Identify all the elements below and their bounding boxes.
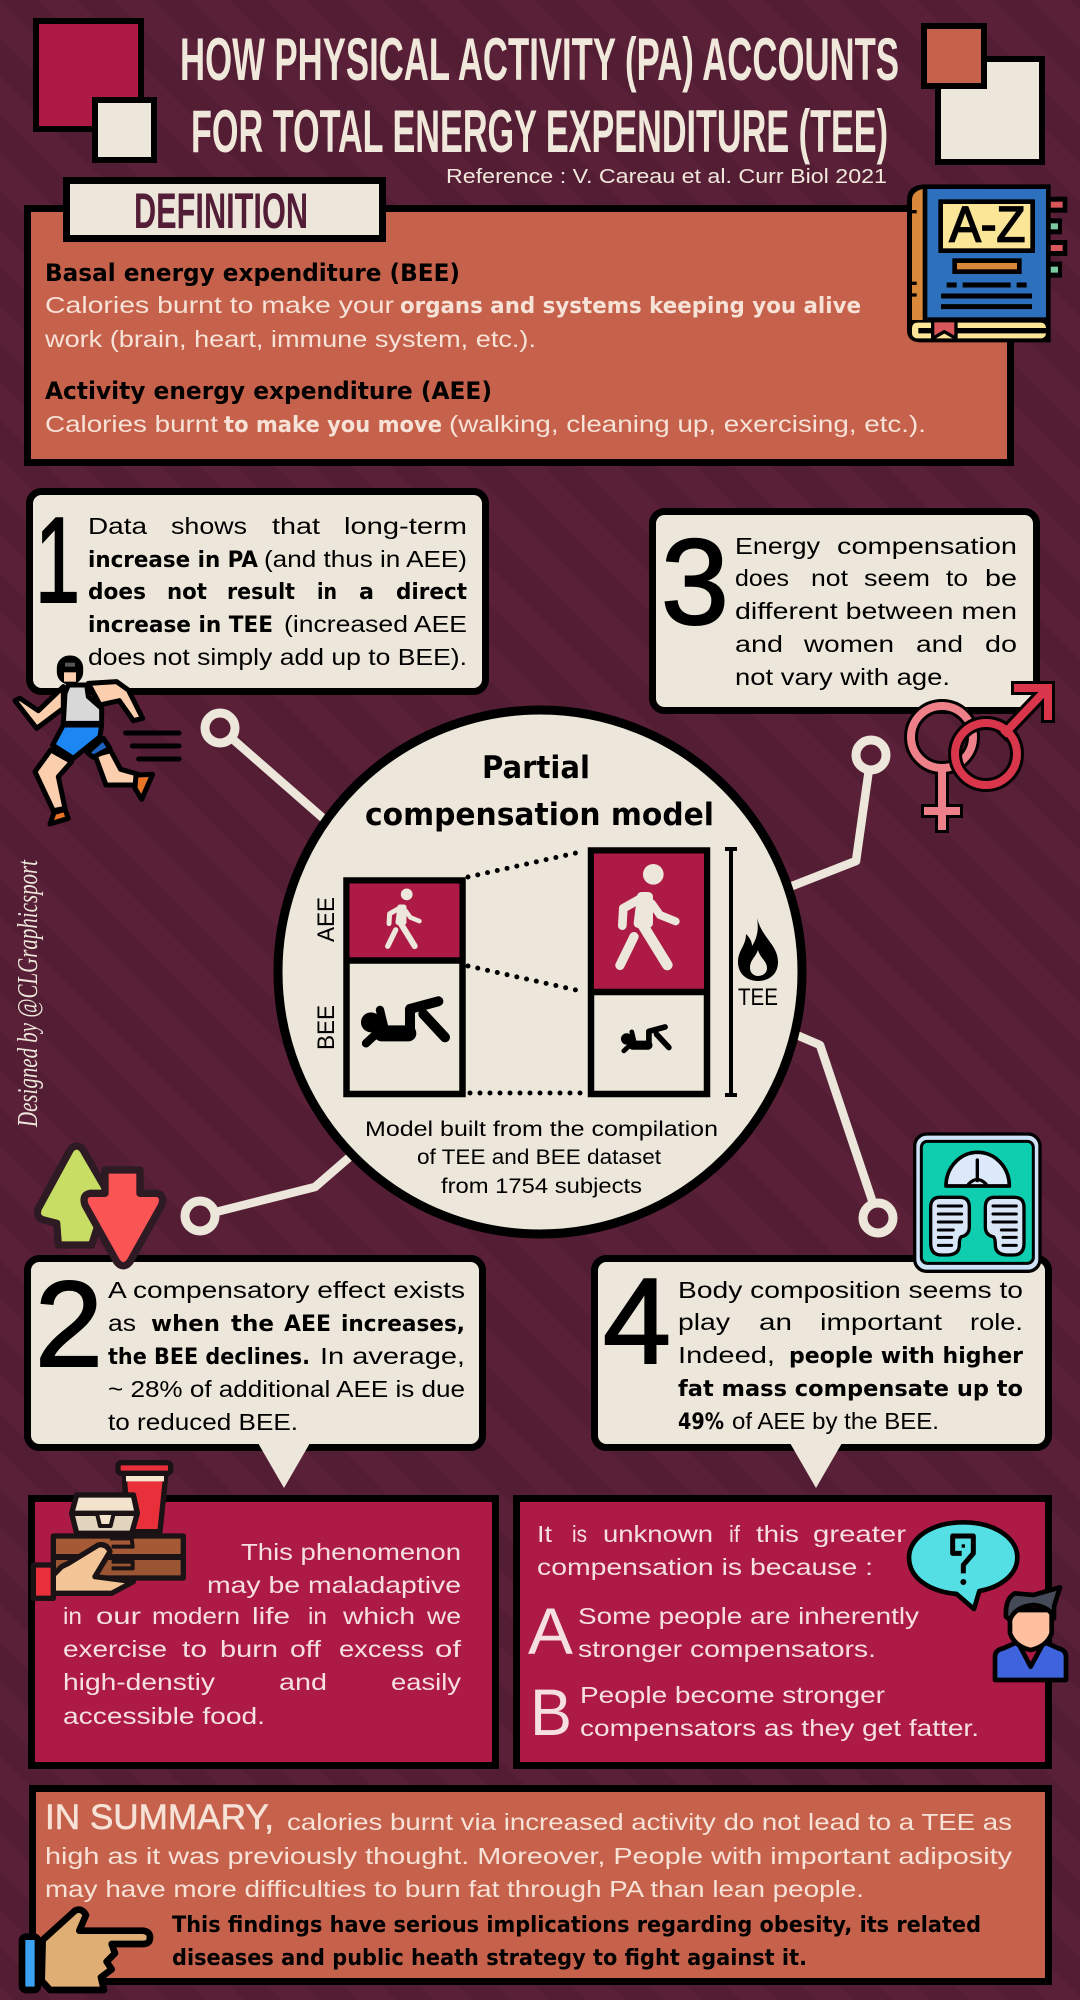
text: maladaptive: and [279, 1669, 327, 1695]
text: note 3: not vary with age. [735, 664, 950, 690]
text: unknown intro: this [756, 1521, 799, 1547]
icon: weighing scale [915, 1134, 1040, 1271]
icon: arrows up and down [37, 1146, 163, 1266]
panel: maladaptive [32, 1498, 496, 1766]
text: note 4: 49% [678, 1410, 724, 1435]
label: AEE: AEE [313, 897, 340, 942]
text: BEE definition: organs and systems keeping you alive [400, 294, 861, 319]
definition tab: DEFINITION [134, 183, 308, 239]
panel: summary [32, 1788, 1048, 1982]
text: AEE definition: (walking, cleaning up, exercising, etc.). [449, 411, 926, 437]
text: note 3: not [811, 565, 849, 591]
text: note 2: A compensatory effect exists [108, 1277, 465, 1303]
text: note 4: Body composition seems to [678, 1277, 1023, 1303]
definition tab [66, 180, 382, 239]
TEE bracket [725, 849, 737, 1095]
caption: model [365, 1118, 718, 1198]
text: note 2: ~ 28% of additional AEE is due [108, 1376, 465, 1402]
option B [530, 1675, 979, 1749]
text: maladaptive: to [182, 1636, 207, 1662]
note 1 [30, 492, 486, 692]
text: note 3: and [916, 631, 963, 657]
text: implications: diseases and public heath strategy to fight against it. [172, 1946, 807, 1971]
text: maladaptive [63, 1539, 462, 1729]
icon: walker large [620, 864, 676, 965]
text: AEE definition [45, 411, 926, 438]
chart: before bar [346, 880, 463, 1094]
text: unknown intro: is [572, 1521, 587, 1547]
text: note 1: (and thus in AEE) [264, 546, 467, 572]
text: maladaptive: may be maladaptive [207, 1572, 461, 1598]
text: note 1: increase in PA [88, 548, 258, 573]
text: note 3: to [946, 565, 968, 591]
note 4 [594, 1253, 1048, 1488]
text: note 3: different between men [735, 598, 1017, 624]
dotted connector lines [468, 851, 585, 1093]
text: unknown intro: It [537, 1521, 553, 1547]
text: in summary: IN SUMMARY, [45, 1798, 274, 1837]
text: maladaptive: modern [152, 1603, 240, 1629]
text: unknown intro: unknown [603, 1521, 713, 1547]
text: note 1: direct [396, 580, 467, 605]
text: unknown intro: greater [813, 1521, 906, 1547]
text: BEE definition: work (brain, heart, immune system, etc.). [44, 326, 536, 352]
heading: model: Partial [482, 750, 590, 786]
text: in summary: may have more difficulties to burn fat through PA than lean people. [45, 1876, 864, 1902]
heading: model [365, 750, 714, 833]
text: unknown intro [537, 1521, 906, 1580]
panel: definition [28, 180, 1010, 462]
label: TEE: TEE [738, 984, 778, 1011]
icon: question bubble [909, 1522, 1017, 1609]
connectors from circle to notes [185, 713, 893, 1233]
reference line: Reference : V. Careau et al. Curr Biol 2021 [446, 166, 887, 188]
text: note 3: Energy [735, 533, 821, 559]
text: note 1: a [359, 580, 374, 605]
text: unknown intro: if [729, 1521, 741, 1547]
text: in summary: calories burnt via increased activity do not lead to a TEE as [287, 1809, 1012, 1835]
text: maladaptive: in [63, 1603, 82, 1629]
text: note 2: increases, [341, 1312, 465, 1337]
numeral 2: 2 [35, 1256, 103, 1392]
icon: gender symbols [911, 688, 1048, 826]
text: maladaptive: This phenomenon [241, 1539, 461, 1565]
text: note 4: an [759, 1309, 792, 1335]
text: note 1: (increased AEE [284, 611, 467, 637]
text: maladaptive: easily [391, 1669, 462, 1695]
icon: A-Z book: A-Z [949, 197, 1025, 253]
text: note 1: does not simply add up to BEE). [88, 644, 467, 670]
credit: Designed by @CLGraphicsport [13, 859, 44, 1128]
note 2 [28, 1256, 482, 1488]
text: maladaptive: off [290, 1636, 322, 1662]
text: note 1: long-term [344, 513, 467, 539]
text: maladaptive: exercise [63, 1636, 167, 1662]
icon: flame [738, 918, 778, 981]
text: in summary: high as it was previously thought. Moreover, People with important adiposity [45, 1843, 1013, 1869]
text: in summary [45, 1798, 1013, 1902]
option B: People become stronger [580, 1682, 885, 1708]
text: unknown intro: compensation is because : [537, 1554, 873, 1580]
callout tail [790, 1443, 842, 1488]
icon: hand with food [33, 1463, 183, 1598]
icon: pointing hand [22, 1910, 150, 1990]
callout tail [258, 1443, 310, 1488]
icon: A-Z book [909, 187, 1067, 340]
title [180, 26, 899, 165]
caption: model: Model built from the compilation [365, 1118, 718, 1141]
note 3 [652, 512, 1036, 710]
text: note 2: when [151, 1312, 220, 1337]
option A: Some people are inherently [578, 1603, 920, 1629]
icon: lying person large [361, 1001, 445, 1043]
text: note 2 [108, 1277, 465, 1435]
text: note 1: shows [171, 513, 247, 539]
text: note 3: do [985, 631, 1017, 657]
panel: partial compensation model [278, 710, 802, 1234]
panel: unknown compensation [516, 1498, 1048, 1766]
text: note 4 [678, 1277, 1023, 1435]
text: note 1: increase in TEE [88, 613, 273, 638]
text: note 4: role. [970, 1309, 1023, 1335]
chart: after bar [591, 850, 707, 1094]
text: maladaptive: of [435, 1636, 462, 1662]
text: maladaptive: our [96, 1603, 141, 1629]
text: implications [172, 1913, 981, 1971]
text: note 3: does [735, 565, 789, 591]
text: maladaptive: high-denstiy [63, 1669, 216, 1695]
text: BEE heading: Basal energy expenditure (BEE) [45, 259, 460, 287]
text: note 4: Indeed, [678, 1342, 775, 1368]
text: note 1 [88, 513, 467, 670]
text: note 1: not [167, 580, 207, 605]
text: note 1: result [227, 580, 295, 605]
text: BEE definition: Calories burnt to make your [45, 292, 394, 318]
text: note 3 [735, 533, 1017, 690]
text: AEE definition: Calories burnt [45, 411, 219, 437]
caption: model: of TEE and BEE dataset [417, 1146, 661, 1169]
text: note 2: the BEE declines. [108, 1345, 310, 1370]
text: note 2: as [108, 1310, 136, 1336]
option A: stronger compensators. [578, 1636, 876, 1662]
numeral 4: 4 [603, 1253, 671, 1389]
text: note 4: fat mass compensate up to [678, 1377, 1023, 1402]
option A [528, 1594, 920, 1668]
text: note 1: does [88, 580, 146, 605]
text: note 4: of AEE by the BEE. [732, 1408, 939, 1434]
option A: A [528, 1594, 573, 1668]
text: maladaptive: we [426, 1603, 461, 1629]
text: note 2: to reduced BEE. [108, 1409, 298, 1435]
text: note 3: compensation [837, 533, 1017, 559]
text: note 4: people with higher [789, 1344, 1023, 1369]
text: implications: This findings have serious implications regarding obesity, its related [172, 1913, 981, 1938]
caption: model: from 1754 subjects [441, 1175, 642, 1198]
text: maladaptive: life [252, 1603, 290, 1629]
heading: model: compensation model [365, 797, 714, 833]
text: note 3: seem [864, 565, 930, 591]
text: maladaptive: which [342, 1603, 415, 1629]
text: note 1: Data [88, 513, 147, 539]
option B: B [530, 1675, 572, 1749]
icon: walker small [388, 888, 419, 946]
text: note 3: and [735, 631, 783, 657]
option B: compensators as they get fatter. [580, 1715, 979, 1741]
text: note 3: women [803, 631, 894, 657]
numeral 1: 1 [35, 492, 80, 628]
decoration: top-left squares [36, 21, 154, 160]
decoration: top-right squares [924, 26, 1042, 162]
text: maladaptive: accessible food. [63, 1703, 265, 1729]
label: BEE: BEE [313, 1005, 340, 1050]
text: note 2: the [231, 1312, 274, 1337]
text: BEE definition [44, 292, 861, 352]
icon: lying person small [621, 1027, 669, 1051]
text: note 4: play [678, 1309, 731, 1335]
text: note 1: in [317, 580, 337, 605]
icon: runner [15, 658, 179, 824]
icon: thinking man [995, 1587, 1066, 1680]
text: note 2: In average, [320, 1343, 465, 1369]
text: maladaptive: in [308, 1603, 327, 1629]
text: note 2: AEE [284, 1312, 331, 1337]
text: maladaptive: excess [339, 1636, 424, 1662]
numeral 3: 3 [661, 514, 729, 650]
text: maladaptive: burn [220, 1636, 278, 1662]
text: note 4: important [820, 1309, 943, 1335]
text: AEE definition: to make you move [224, 413, 442, 438]
text: note 1: that [272, 513, 321, 539]
text: note 3: be [985, 565, 1017, 591]
text: AEE heading: Activity energy expenditure (AEE) [45, 377, 492, 405]
